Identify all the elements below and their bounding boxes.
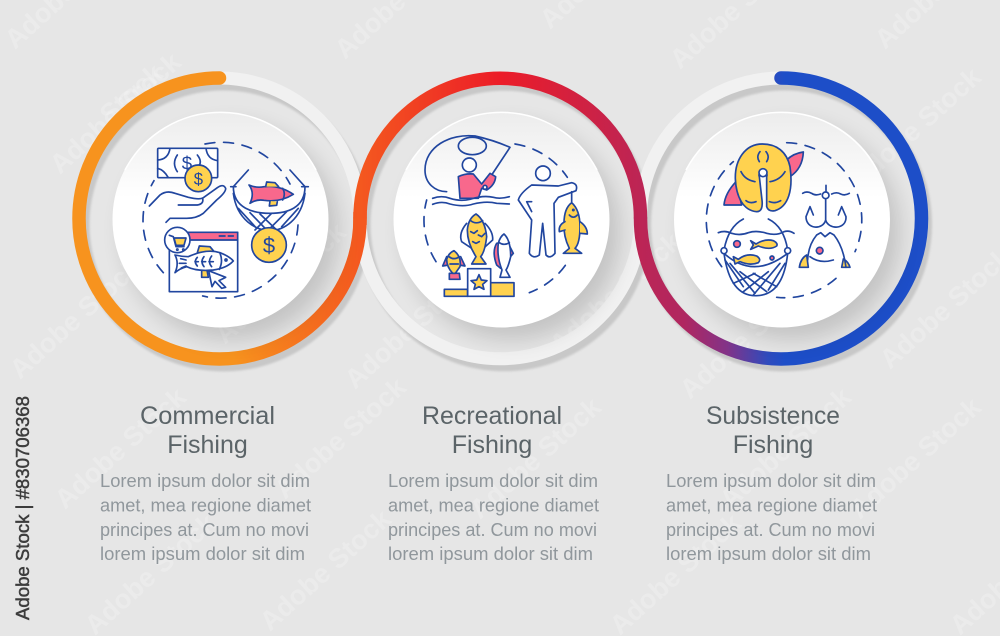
body text: Lorem ipsum dolor sit dim bbox=[388, 471, 598, 491]
body text: Lorem ipsum dolor sit dim bbox=[100, 471, 310, 491]
browser window bbox=[169, 232, 238, 292]
column: recreational fishing: principes at. Cum no movi bbox=[388, 520, 597, 540]
body text: Lorem ipsum dolor sit dim bbox=[666, 471, 876, 491]
circle panel: commercial fishing bbox=[112, 112, 339, 340]
watermark pattern: Adobe Stock bbox=[544, 226, 687, 359]
light ring segments bbox=[220, 78, 781, 359]
gradient S-curve ribbon bbox=[353, 212, 367, 225]
watermark pattern: Adobe Stock bbox=[464, 391, 607, 524]
watermark pattern: Adobe Stock bbox=[339, 261, 482, 394]
watermark pattern: Adobe Stock bbox=[254, 503, 397, 636]
trophy fish left bbox=[443, 251, 465, 279]
column: commercial fishing: lorem ipsum dolor sit dim bbox=[100, 544, 305, 564]
column: commercial fishing: Fishing bbox=[167, 431, 248, 459]
heading: Recreational bbox=[422, 402, 562, 430]
icon: commercial fishing bbox=[143, 142, 308, 298]
circle panel: subsistence fishing bbox=[674, 112, 900, 340]
column: commercial fishing bbox=[100, 402, 311, 564]
coin: $ bbox=[194, 169, 203, 188]
net with fish bbox=[718, 219, 794, 296]
column: subsistence fishing: lorem ipsum dolor sit dim bbox=[666, 544, 871, 564]
column: recreational fishing: Fishing bbox=[452, 431, 532, 459]
watermark pattern: Adobe Stock bbox=[844, 61, 987, 194]
ring shadows bbox=[83, 84, 926, 365]
banknote bbox=[158, 148, 218, 178]
large coin bbox=[252, 228, 286, 262]
coin bbox=[185, 165, 212, 192]
large coin: $ bbox=[263, 233, 275, 258]
trophy fish right bbox=[494, 234, 513, 277]
column: subsistence fishing: principes at. Cum no movi bbox=[666, 520, 875, 540]
salmon steak bbox=[724, 144, 803, 212]
column: commercial fishing: principes at. Cum no movi bbox=[100, 520, 309, 540]
fish head bbox=[799, 233, 850, 267]
icon: recreational fishing bbox=[424, 136, 587, 296]
fishing net bbox=[231, 170, 308, 231]
banknote: $ bbox=[182, 152, 193, 173]
circle panel: recreational fishing bbox=[394, 112, 620, 340]
column: subsistence fishing: amet, mea regione diamet bbox=[666, 496, 877, 516]
fish for sale bbox=[175, 246, 233, 277]
column: subsistence fishing: Fishing bbox=[733, 431, 813, 459]
watermark pattern: Adobe Stock bbox=[269, 371, 412, 504]
watermark pattern: Adobe Stock bbox=[44, 46, 187, 179]
watermark pattern: Adobe Stock bbox=[209, 216, 352, 349]
trophy fish top bbox=[461, 214, 493, 264]
open hand bbox=[149, 186, 226, 222]
column: recreational fishing bbox=[388, 402, 599, 564]
watermark pattern: Adobe Stock bbox=[49, 381, 192, 514]
stock id label: Adobe Stock | #830706368 bbox=[13, 396, 33, 620]
column: subsistence fishing bbox=[666, 402, 877, 564]
winners podium bbox=[444, 269, 514, 296]
angler in water bbox=[425, 136, 510, 206]
heading: Commercial bbox=[140, 402, 275, 430]
watermark pattern: Adobe Stock bbox=[714, 381, 857, 514]
watermark pattern: Stock bbox=[94, 57, 169, 129]
cursor arrow bbox=[209, 271, 226, 288]
watermark pattern: Adobe Stock bbox=[844, 391, 987, 524]
heading: Subsistence bbox=[706, 402, 840, 430]
column: recreational fishing: amet, mea regione diamet bbox=[388, 496, 599, 516]
standing man with fish bbox=[518, 166, 587, 257]
fish hook bbox=[803, 185, 849, 227]
column: recreational fishing: lorem ipsum dolor sit dim bbox=[388, 544, 593, 564]
watermark pattern: Adobe Stock bbox=[4, 251, 147, 384]
caught fish bbox=[249, 182, 293, 206]
cart badge bbox=[165, 227, 190, 253]
icon: subsistence fishing bbox=[706, 143, 862, 298]
column: commercial fishing: amet, mea regione diamet bbox=[100, 496, 311, 516]
watermark pattern: Adobe Stock bbox=[674, 271, 817, 404]
